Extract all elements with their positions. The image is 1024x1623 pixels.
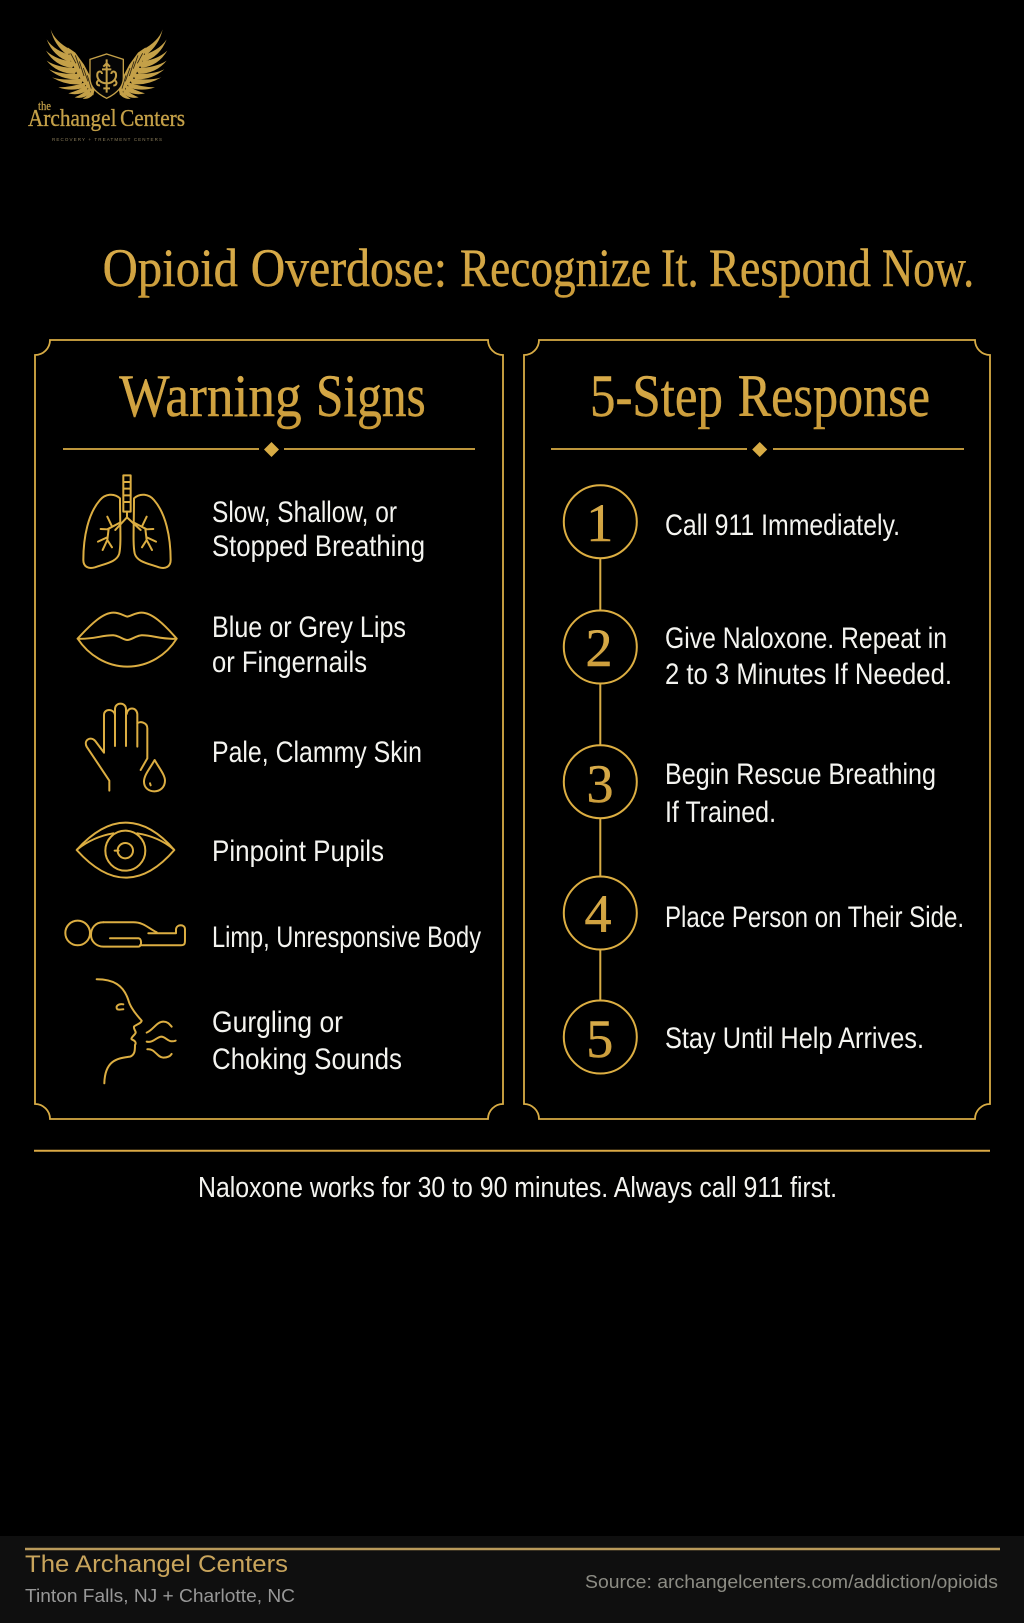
logo: The Archangel Centers [28,29,185,142]
text: Give Naloxone. Repeat in [665,622,947,655]
icon: face profile with sound waves [97,979,176,1083]
panel frame [524,340,990,1119]
heading: warning signs: Signs [316,363,426,429]
icon: eye [77,823,174,878]
step 5 [564,1000,924,1074]
step 2 [564,610,952,691]
title: Recognize [460,238,651,298]
step 1 [564,485,900,558]
number badge [564,1000,637,1074]
text: or Fingernails [212,646,367,679]
icon: logo wings and shield [46,29,167,99]
text: Stopped Breathing [212,530,425,563]
heading: 5-step response: 5-Step [590,363,723,429]
text: Call 911 Immediately. [665,509,900,542]
step 3 [564,745,936,829]
title: Overdose: [251,238,447,298]
warning sign: breathing [83,475,425,568]
title: Opioid [103,238,238,298]
number badge: 1 [586,493,613,553]
icon: lungs [83,475,171,568]
number badge [564,876,637,950]
number badge: 4 [584,884,612,944]
callout: naloxone note: Naloxone works for 30 to 90 minutes. Always call 911 first. [198,1172,837,1204]
icon: hand with drop [86,704,165,791]
number badge: 5 [586,1009,613,1069]
number badge [564,485,637,558]
footer locations: Tinton Falls, NJ + Charlotte, NC [25,1586,295,1606]
number badge: 3 [586,754,614,814]
warning sign: skin [86,704,422,791]
title: It. [661,238,698,298]
warning sign: lips [78,611,406,679]
number badge: 2 [586,618,612,678]
footer source: Source: archangelcenters.com/addiction/opioids [585,1572,998,1592]
text: Gurgling or [212,1006,343,1039]
footer background [0,1536,1024,1623]
text: Pinpoint Pupils [212,835,384,868]
footer organisation name: The Archangel Centers [25,1551,288,1578]
text: Pale, Clammy Skin [212,736,422,769]
text: 2 to 3 Minutes If Needed. [665,658,952,691]
heading: 5-step response: Response [738,363,930,429]
step 4 [564,876,964,950]
panel: 5-step response [524,340,990,1119]
text: If Trained. [665,796,776,829]
logo: The Archangel Centers: Archangel Centers [28,106,185,132]
logo tagline: RECOVERY + TREATMENT CENTERS [52,137,162,142]
text: Choking Sounds [212,1043,402,1076]
text: Blue or Grey Lips [212,611,406,644]
warning sign: pupils [77,823,384,878]
number badge [564,610,637,684]
step connector line [599,558,601,1000]
footer [0,1536,1024,1623]
text: Slow, Shallow, or [212,496,397,529]
heading divider [551,442,964,457]
panel: warning signs [35,340,503,1119]
heading: warning signs: Warning [119,363,302,429]
text: Begin Rescue Breathing [665,758,936,791]
warning sign: limp body [65,921,481,954]
title: Respond [709,238,871,298]
warning sign: sounds [97,979,402,1083]
title: Now. [882,238,974,298]
number badge [564,745,637,818]
heading divider [63,442,475,457]
text: Stay Until Help Arrives. [665,1022,924,1055]
text: Limp, Unresponsive Body [212,921,481,954]
icon: lips [78,613,177,667]
icon: lying body [65,921,185,947]
logo wordmark: the [38,98,51,113]
panel frame [35,340,503,1119]
